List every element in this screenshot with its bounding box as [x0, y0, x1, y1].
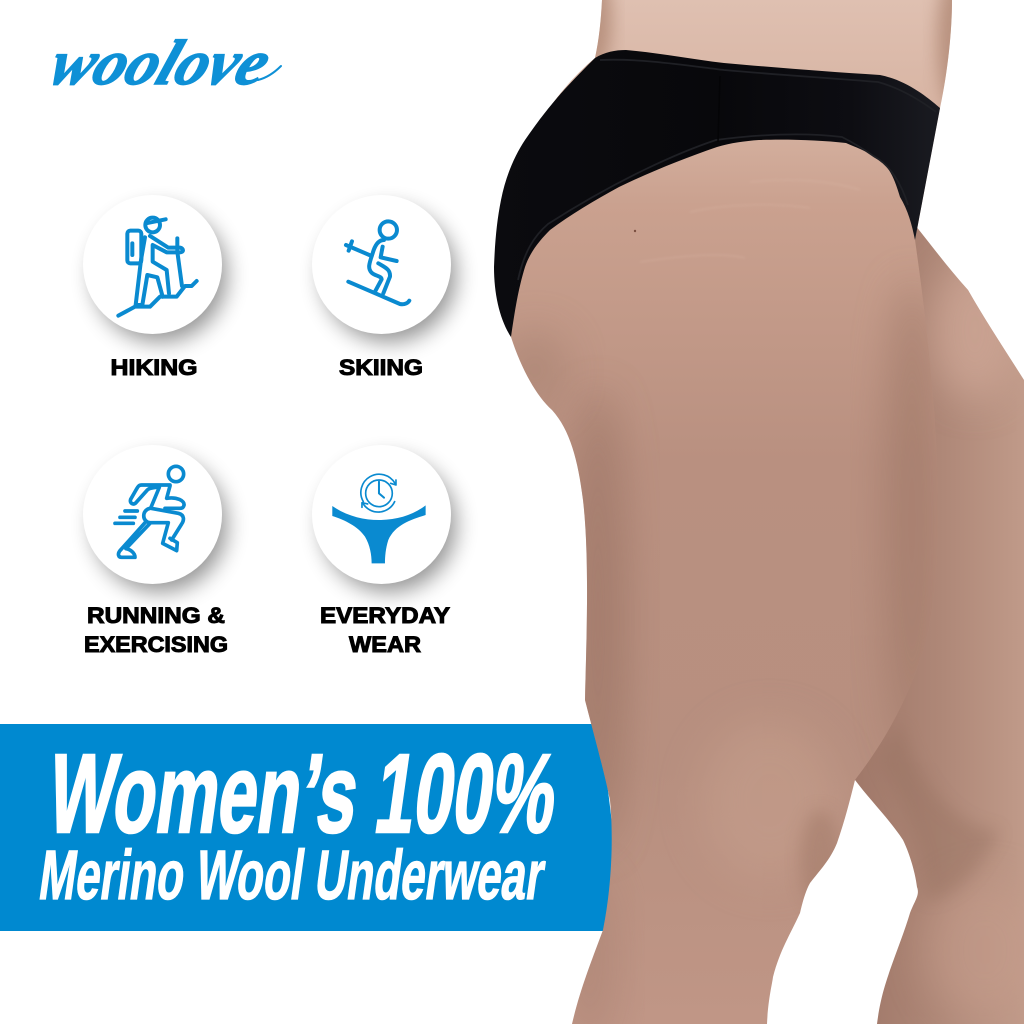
black underwear — [494, 50, 940, 337]
label: EXERCISING — [84, 632, 228, 657]
label — [84, 603, 228, 657]
front leg and torso — [496, 0, 952, 1024]
back leg shading — [880, 260, 1024, 1020]
model photo: legs and hips in black underwear — [494, 0, 1024, 1024]
label: HIKING — [110, 355, 198, 380]
circle — [312, 195, 451, 334]
circle shadow — [322, 458, 456, 592]
circle — [83, 195, 222, 334]
woolove logo: woolove — [41, 28, 280, 99]
activity: skiing — [312, 195, 456, 380]
back leg — [855, 225, 1024, 1024]
icon: runner — [115, 466, 184, 557]
activity: running and exercising — [83, 445, 228, 657]
icon: skier — [346, 221, 409, 304]
activity: hiking — [83, 195, 227, 380]
banner subheadline: Merino Wool Underwear — [35, 835, 550, 914]
waistband and leg seams — [600, 60, 936, 112]
label: EVERYDAY — [320, 603, 450, 628]
icon: clock and underwear — [332, 474, 426, 563]
label: RUNNING & — [87, 603, 225, 628]
banner headline: Women’s 100% — [42, 730, 565, 856]
circle shadow — [93, 208, 227, 342]
stretch marks — [640, 180, 860, 262]
icon: hiker — [118, 218, 197, 316]
label: WEAR — [349, 632, 421, 657]
circle — [312, 445, 451, 584]
activity: everyday wear — [312, 445, 456, 657]
circle shadow — [322, 208, 456, 342]
blue title banner — [0, 724, 625, 931]
circle shadow — [93, 458, 227, 592]
circle — [83, 445, 222, 584]
label: SKIING — [339, 355, 423, 380]
label — [320, 603, 450, 657]
skin shading — [503, 0, 973, 1024]
